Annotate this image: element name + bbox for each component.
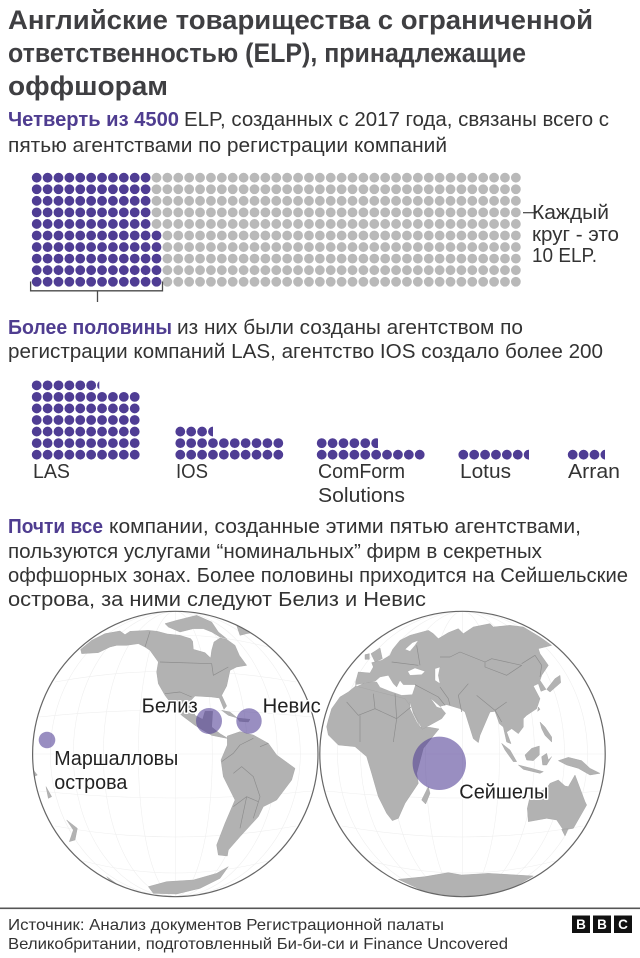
- land: North America: [81, 630, 247, 739]
- text block: offshore: острова, за ними следуют Белиз и Невис: [8, 589, 426, 611]
- land: Madagascar: [422, 787, 430, 804]
- annotation: each circle: Каждый: [532, 202, 609, 224]
- text block: intro: Четверть из 4500: [8, 109, 179, 131]
- text block: LAS: Более половины: [8, 317, 172, 339]
- land: South America: [217, 732, 295, 856]
- borders: Africa and Eurasia: [347, 645, 542, 742]
- title: [8, 5, 593, 101]
- title: Английские товарищества с ограниченной: [8, 5, 593, 35]
- land: Africa: [327, 680, 439, 821]
- source note: Источник: Анализ документов Регистрационной палаты: [8, 917, 444, 934]
- land: Caribbean islands: [222, 710, 250, 722]
- land: New Zealand and Pacific islands: [33, 770, 77, 842]
- text block: intro: [8, 109, 609, 157]
- bubble: Belize: [196, 708, 222, 734]
- title: ответственностью (ELP), принадлежащие: [8, 38, 526, 68]
- text block: offshore: оффшорных зонах. Более половины приходится на Сейшельские: [8, 565, 628, 587]
- text block: LAS: из них были созданы агентством по: [177, 317, 523, 339]
- land: UK and Ireland: [365, 648, 382, 662]
- dot chart: 450 circles: [31, 178, 516, 302]
- logo: BBC: C: [618, 917, 628, 932]
- text block: LAS: регистрации компаний LAS, агентство IOS создало более 200: [8, 341, 603, 363]
- text block: offshore: Почти все: [8, 516, 103, 538]
- source note: [8, 917, 508, 953]
- land: Australia: [527, 775, 587, 836]
- dot group: ComForm Solutions: ComForm: [318, 461, 405, 483]
- text block: intro: ELP, созданных с 2017 года, связаны всего с: [184, 109, 609, 131]
- bracket: [31, 282, 162, 302]
- circle outline: [33, 611, 318, 897]
- dot group: Arran: Arran: [568, 461, 620, 483]
- borders: South America: [222, 738, 268, 828]
- label: Marshall Islands: [54, 748, 178, 794]
- title: оффшорам: [8, 71, 168, 101]
- map: Americas globe: [33, 611, 318, 897]
- land: Antarctica: [398, 873, 533, 897]
- logo: BBC: B: [597, 917, 607, 932]
- text block: intro: пятью агентствами по регистрации компаний: [8, 135, 447, 157]
- text block: offshore: компании, созданные этими пятью агентствами,: [109, 516, 581, 538]
- label: Nevis: Невис: [263, 696, 321, 718]
- seas: Mediterranean, Black Sea, Caspian, Baltic, Gulf, Red Sea: [356, 640, 442, 728]
- dot group: IOS: [176, 432, 278, 483]
- dot group: Lotus: [458, 450, 529, 478]
- dot group: ComForm Solutions: Solutions: [318, 485, 405, 507]
- land: Japan and Philippines: [538, 675, 561, 742]
- land: Arctic islands and Greenland: [165, 615, 250, 639]
- bubble: Nevis: [236, 708, 262, 734]
- land: Eurasia: [356, 624, 552, 744]
- label: Marshall Islands: острова: [54, 772, 128, 794]
- bubble: Marshall Islands: [39, 732, 55, 748]
- label: Marshall Islands: Маршалловы: [54, 748, 178, 770]
- logo: BBC: B: [576, 917, 586, 932]
- dot group: Lotus: Lotus: [460, 461, 511, 483]
- label: Seychelles: Сейшелы: [459, 781, 548, 803]
- annotation: each circle: 10 ELP.: [532, 245, 597, 267]
- land: Antarctica: [107, 867, 228, 894]
- land: New Guinea: [558, 757, 600, 775]
- bubble: Seychelles: [413, 737, 466, 790]
- annotation: each circle: круг - это: [532, 224, 619, 246]
- source note: Великобритании, подготовленный Би-би-си и Finance Uncovered: [8, 936, 508, 953]
- dot group: LAS: [33, 385, 145, 483]
- dot group: IOS: IOS: [176, 461, 208, 483]
- text block: offshore: [8, 516, 628, 611]
- text block: offshore: пользуются услугами “номинальных” фирм в секретных: [8, 541, 542, 563]
- label: Belize: Белиз: [142, 696, 198, 718]
- circle outline: [320, 611, 605, 897]
- logo: BBC: [572, 916, 632, 933]
- borders: North America: [145, 631, 228, 697]
- map: Africa-Asia globe: [320, 611, 605, 897]
- dot group: ComForm Solutions: [318, 443, 420, 507]
- dot group: LAS: LAS: [33, 461, 70, 483]
- annotation: each circle: [523, 202, 619, 267]
- text block: LAS: [8, 317, 603, 363]
- land: Sumatra, Java, Borneo, Sulawesi: [502, 743, 552, 773]
